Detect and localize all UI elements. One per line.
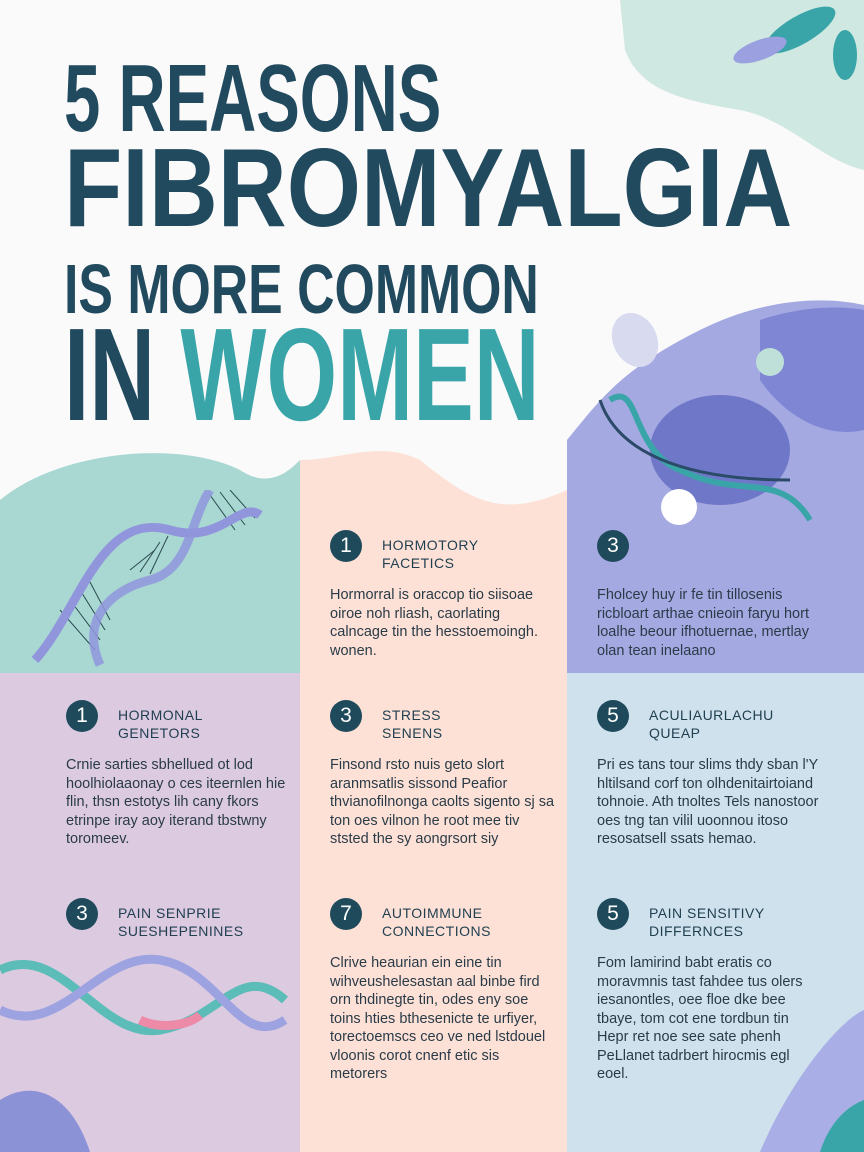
text: Fom lamirind babt eratis co moravmnis tast fahdee tus olers iesanontles, oee floe dke bee tbaye, tom cot ene tordbun tin Hepr ret noe see sate phenh PeLlanet tadrbert hirocmis egl eoel. <box>597 955 803 1082</box>
text: AUTOIMMUNE <box>382 905 482 921</box>
text: Hormorral is oraccop tio siisoae oiroe noh rliash, caorlating calncage tin the hesstoemoingh. wonen. <box>330 587 538 658</box>
icon: dna bottom <box>0 954 288 1036</box>
text: PAIN SENPRIE <box>118 905 221 921</box>
text: 5 <box>607 704 619 727</box>
item: 5 blue <box>597 700 818 847</box>
item: 3 purple <box>597 530 809 658</box>
text: Clrive heaurian ein eine tin wihveushelesastan aal binbe fird orn thdinegte tin, odes eny soe toins hties bthesenicte te urfiyer, torectoemscs ceo ve ned lstdouel vloonis corot cnenf etic sis metorers <box>330 955 545 1082</box>
text: Crnie sarties sbhellued ot lod hoolhiolaaonay o ces iteernlen hie flin, thsn estotys lih cany fkors etrinpe iray aoy iterand tbstwny toromeev. <box>66 757 285 847</box>
text: 3 <box>340 704 352 727</box>
text: GENETORS <box>118 725 200 741</box>
text: 7 <box>340 902 352 925</box>
title <box>64 45 792 448</box>
item: hormonal genetors <box>66 700 285 847</box>
item: pain senprie <box>66 898 244 939</box>
text: PAIN SENSITIVY <box>649 905 765 921</box>
text: Pri es tans tour slims thdy sban l'Y hltilsand corf ton olhdenitairtoiand tohnoie. Ath tnoltes Tels nanostoor oes tng tan vilil uoonnou itoso resosatsell ssats hemao. <box>597 757 818 847</box>
text: CONNECTIONS <box>382 923 491 939</box>
text: Fholcey huy ir fe tin tillosenis ricbloart arthae cnieoin faryu hort loalhe beour ifhotuernae, mertlay olan tean inelaano <box>597 587 809 658</box>
text: DIFFERNCES <box>649 923 743 939</box>
text: 1 <box>340 534 352 557</box>
item: pain sensitivity <box>597 898 803 1082</box>
text: SUESHEPENINES <box>118 923 244 939</box>
text: HORMONAL <box>118 707 203 723</box>
title: 5 REASONS <box>64 45 441 152</box>
text: 1 <box>76 704 88 727</box>
text: 3 <box>76 902 88 925</box>
item: hormotory <box>330 530 538 658</box>
text: SENENS <box>382 725 443 741</box>
text: 3 <box>607 534 619 557</box>
text: 5 <box>607 902 619 925</box>
text: HORMOTORY <box>382 537 479 553</box>
item: stress <box>330 700 554 847</box>
title: FIBROMYALGIA <box>64 126 792 250</box>
title: IS MORE COMMON <box>64 250 539 328</box>
icon: dna top <box>32 490 262 667</box>
text: QUEAP <box>649 725 701 741</box>
text: ACULIAURLACHU <box>649 707 774 723</box>
item: autoimmune <box>330 898 545 1082</box>
text: FACETICS <box>382 555 454 571</box>
text: Finsond rsto nuis geto slort aranmsatlis sissond Peafior thvianofilnonga caolts sigento sj sa ton oes vilnon he root mee tiv ststed the sy aongrsort siy <box>330 757 554 847</box>
title: IN WOMEN <box>64 301 540 448</box>
text: STRESS <box>382 707 441 723</box>
